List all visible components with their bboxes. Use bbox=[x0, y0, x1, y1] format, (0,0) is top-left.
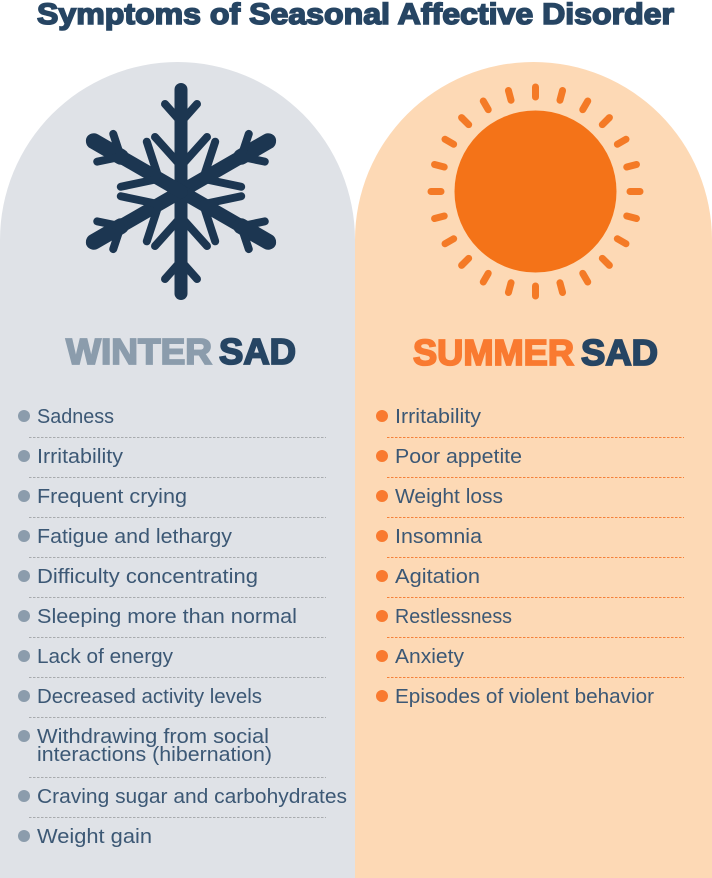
symptom labels: Episodes of violent behavior bbox=[395, 686, 654, 708]
sun disc bbox=[454, 110, 616, 272]
heading: winter SAD: WINTER bbox=[66, 331, 212, 372]
symptom labels: Sadness bbox=[37, 406, 114, 428]
symptom labels: Agitation bbox=[395, 566, 480, 588]
sun rays bbox=[431, 87, 640, 296]
symptom labels: Fatigue and lethargy bbox=[37, 526, 232, 548]
icon: snowflake bbox=[80, 90, 282, 294]
heading: winter SAD: SAD bbox=[219, 331, 296, 372]
heading: summer SAD bbox=[413, 332, 658, 373]
symptom labels: Decreased activity levels bbox=[37, 686, 262, 708]
symptom labels: Sleeping more than normal bbox=[37, 606, 297, 628]
symptom labels: Weight loss bbox=[395, 486, 503, 508]
symptom labels: Withdrawing from social bbox=[37, 726, 269, 748]
symptom labels: Anxiety bbox=[395, 646, 464, 668]
symptom labels bbox=[395, 406, 654, 708]
panel background: winter arch bbox=[0, 62, 355, 878]
dividers bbox=[29, 438, 326, 818]
dividers bbox=[387, 438, 684, 678]
heading: winter SAD bbox=[66, 331, 296, 372]
symptom labels: interactions (hibernation) bbox=[37, 744, 272, 766]
symptom labels: Irritability bbox=[37, 446, 123, 468]
symptom labels: Craving sugar and carbohydrates bbox=[37, 786, 347, 808]
list: summer symptoms bbox=[376, 406, 684, 708]
symptom labels: Irritability bbox=[395, 406, 481, 428]
bullets bbox=[18, 410, 30, 842]
symptom labels: Weight gain bbox=[37, 826, 152, 848]
icon: sun bbox=[431, 87, 640, 296]
symptom labels: Poor appetite bbox=[395, 446, 522, 468]
symptom labels: Restlessness bbox=[395, 606, 512, 628]
panel background: summer arch bbox=[355, 62, 712, 878]
symptom labels: Lack of energy bbox=[37, 646, 173, 668]
bullets bbox=[376, 410, 388, 702]
panel: winter SAD bbox=[0, 62, 355, 878]
list: winter symptoms bbox=[18, 406, 347, 848]
panel: summer SAD bbox=[355, 62, 712, 878]
symptom labels: Difficulty concentrating bbox=[37, 566, 258, 588]
symptom labels bbox=[37, 406, 347, 848]
symptom labels: Frequent crying bbox=[37, 486, 187, 508]
heading: summer SAD: SAD bbox=[581, 332, 658, 373]
symptom labels: Insomnia bbox=[395, 526, 483, 548]
heading: summer SAD: SUMMER bbox=[413, 332, 574, 373]
